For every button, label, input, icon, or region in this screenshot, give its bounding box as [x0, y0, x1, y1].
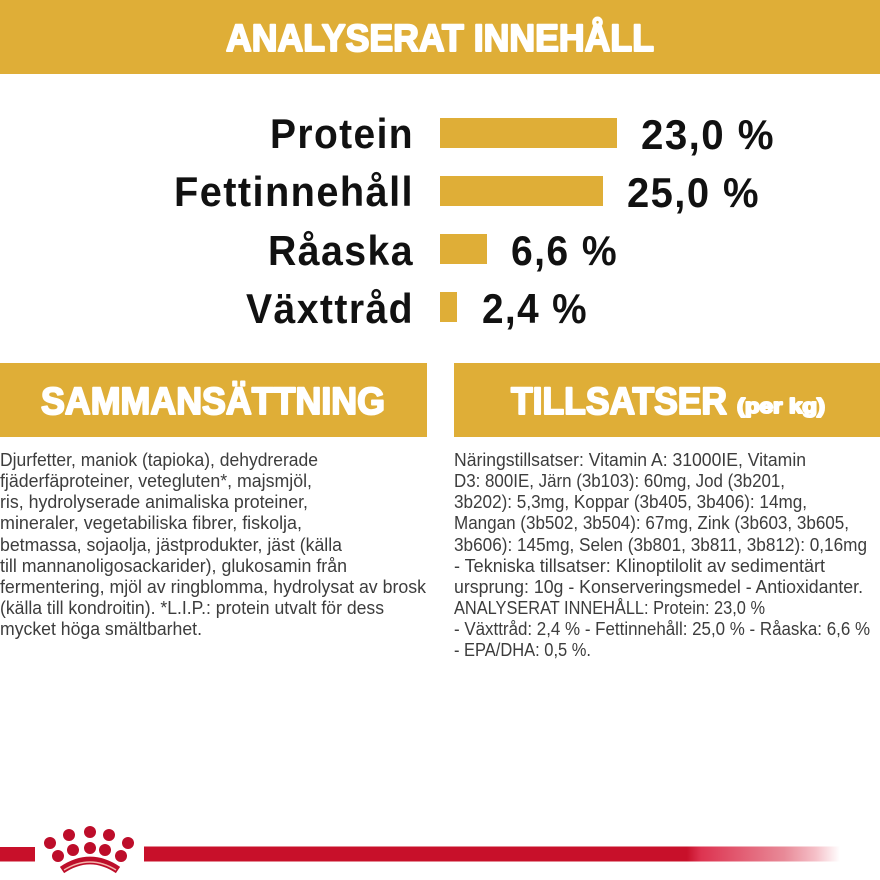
- text block: sammansättning: Djurfetter, maniok (tapioka), dehydrerade: [0, 450, 318, 470]
- text block: sammansättning: ris, hydrolyserade animaliska proteiner,: [0, 492, 308, 512]
- text block: tillsatser: D3: 800IE, Järn (3b103): 60mg, Jod (3b201,: [454, 471, 785, 491]
- row: växttråd: Växttråd: [246, 285, 414, 332]
- row: fettinnehåll: Fettinnehåll: [174, 168, 414, 215]
- text block: tillsatser: ANALYSERAT INNEHÅLL: Protein: 23,0 %: [454, 598, 765, 618]
- text block: tillsatser: 3b202): 5,3mg, Koppar (3b405, 3b406): 14mg,: [454, 492, 807, 512]
- heading: tillsatser per kg: TILLSATSER: [511, 381, 727, 423]
- text block: tillsatser: [454, 450, 870, 660]
- panel: analysed content header: [0, 0, 880, 74]
- heading: sammansättning: SAMMANSÄTTNING: [41, 380, 385, 423]
- row: protein: [270, 110, 775, 158]
- text block: tillsatser: - Tekniska tillsatser: Klinoptilolit av sedimentärt: [454, 556, 825, 576]
- text block: sammansättning: fjäderfäproteiner, vetegluten*, majsmjöl,: [0, 471, 312, 491]
- panel: tillsatser header: [454, 363, 880, 437]
- text block: tillsatser: Mangan (3b502, 3b504): 67mg, Zink (3b603, 3b605,: [454, 513, 849, 533]
- heading: tillsatser per kg: (per kg): [737, 396, 825, 418]
- text block: tillsatser: 3b606): 145mg, Selen (3b801, 3b811, 3b812): 0,16mg: [454, 535, 867, 555]
- text block: sammansättning: [0, 450, 427, 639]
- row: protein: Protein: [270, 110, 414, 157]
- panel: sammansättning header: [0, 363, 427, 437]
- text block: sammansättning: mycket höga smältbarhet.: [0, 619, 202, 639]
- text block: tillsatser: ursprung: 10g - Konserveringsmedel - Antioxidanter.: [454, 577, 863, 597]
- row: råaska: [268, 227, 618, 274]
- icon: royal crown logo: [44, 826, 134, 870]
- row: växttråd: 2,4 %: [482, 285, 588, 332]
- bar chart: analysed content: [174, 110, 775, 332]
- text block: sammansättning: fermentering, mjöl av ringblomma, hydrolysat av brosk: [0, 577, 427, 597]
- text block: sammansättning: betmassa, sojaolja, jästprodukter, jäst (källa: [0, 535, 343, 555]
- text block: sammansättning: till mannanoligosackarider), glukosamin från: [0, 556, 347, 576]
- footer: brand bar: [0, 826, 840, 870]
- row: fettinnehåll: 25,0 %: [627, 169, 760, 216]
- row: växttråd: [246, 285, 588, 332]
- row: råaska: 6,6 %: [511, 227, 618, 274]
- row: fettinnehåll: [174, 168, 760, 216]
- row: råaska: Råaska: [268, 227, 414, 274]
- text block: tillsatser: - EPA/DHA: 0,5 %.: [454, 640, 591, 660]
- text block: sammansättning: mineraler, vegetabiliska fibrer, fiskolja,: [0, 513, 302, 533]
- heading: analyserat innehåll: ANALYSERAT INNEHÅLL: [226, 16, 654, 60]
- row: protein: 23,0 %: [641, 111, 775, 158]
- text block: tillsatser: Näringstillsatser: Vitamin A: 31000IE, Vitamin: [454, 450, 806, 470]
- text block: sammansättning: (källa till kondroitin). *L.I.P.: protein utvalt för dess: [0, 598, 384, 618]
